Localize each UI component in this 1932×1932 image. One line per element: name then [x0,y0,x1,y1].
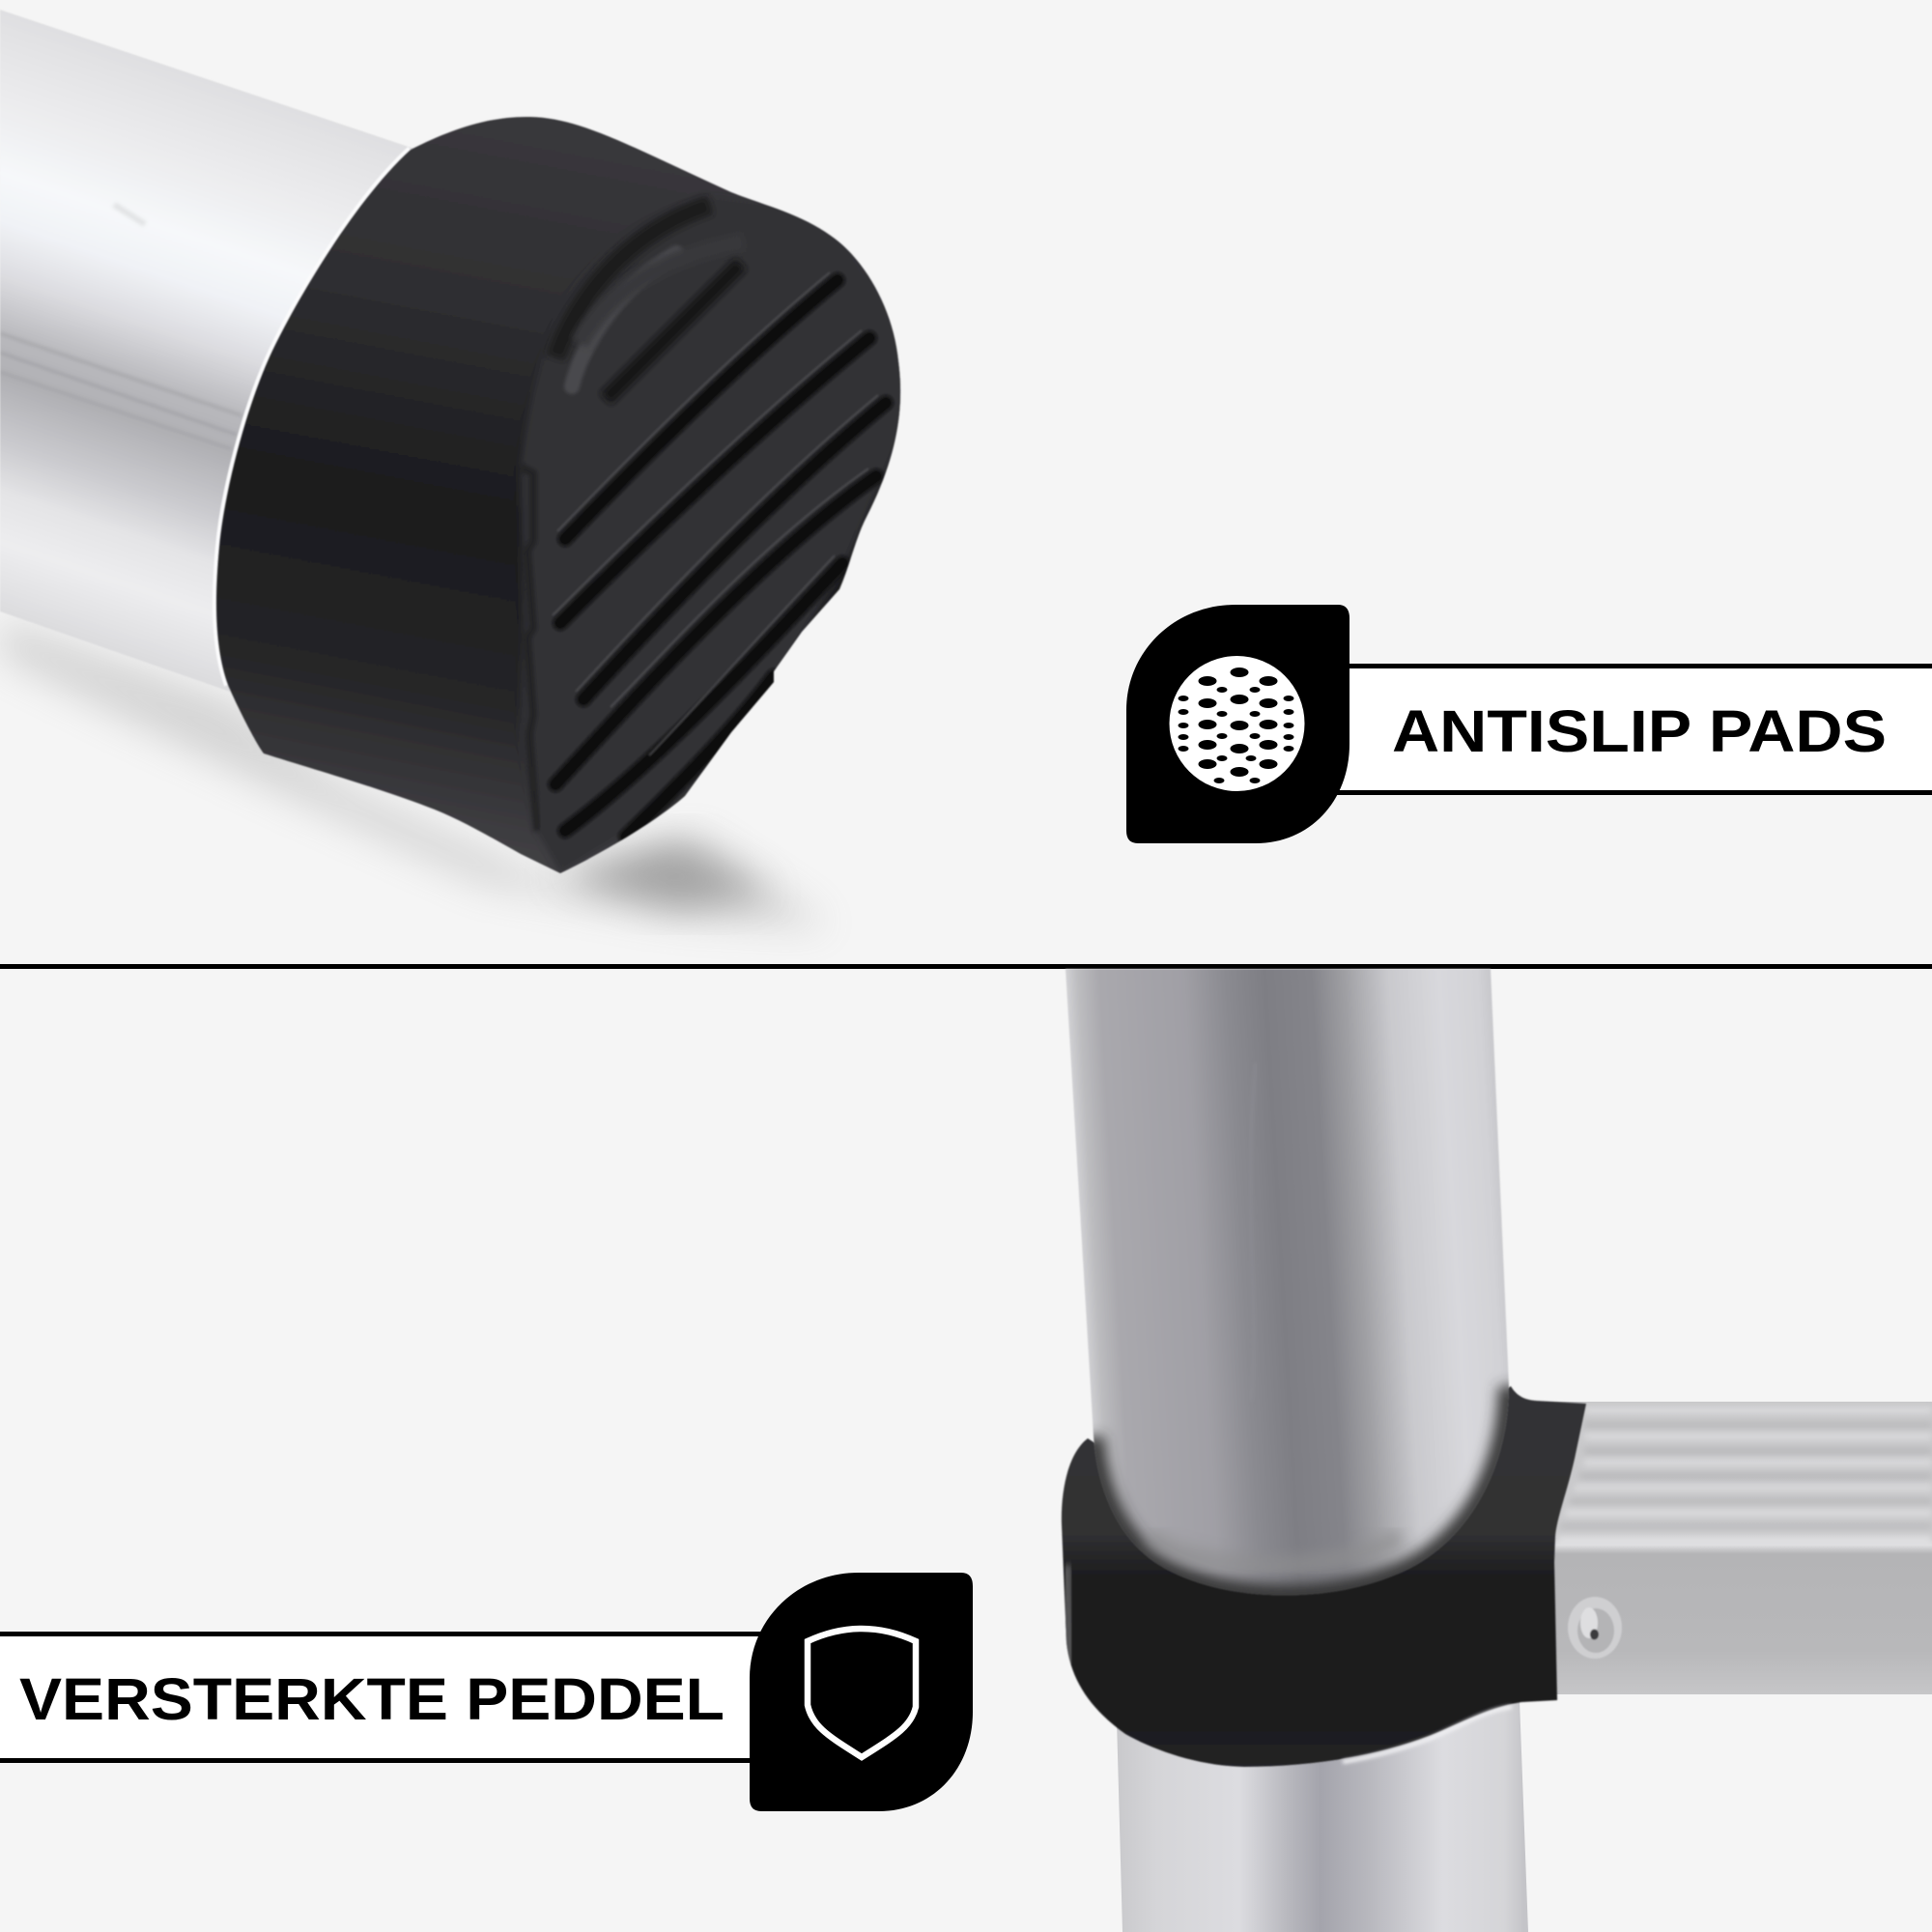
rivet [1568,1597,1622,1659]
panel: antislip rubber foot photo [0,10,903,927]
upper aluminium tube [1065,969,1509,1595]
icon: leaf badge with shield [750,1573,973,1811]
aluminium tube [0,10,417,692]
label text: ANTISLIP PADS [1392,698,1887,765]
callout: versterkte peddel [0,1573,973,1811]
lower aluminium tube [1117,1700,1528,1932]
panel: reinforced rung joint photo [1062,969,1932,1932]
label banner [0,1632,773,1763]
bright rim at tube end [216,150,411,685]
horizontal rung [1546,1402,1932,1694]
label banner [1333,664,1932,795]
end face with ribs [521,198,903,873]
icon: leaf badge with perforated pad [1126,605,1350,843]
rib grooves [555,280,886,837]
rubber cap collar [1062,1386,1586,1767]
callout: antislip pads [1126,605,1932,843]
label text: VERSTERKTE PEDDEL [19,1666,724,1733]
dark crescent above grip arc [555,205,710,357]
grip arc ridge [572,253,676,386]
rubber cap body [216,117,903,873]
rib edge highlights [553,272,878,755]
floor shadow under tube and cap [0,618,831,927]
divider line [0,964,1932,969]
